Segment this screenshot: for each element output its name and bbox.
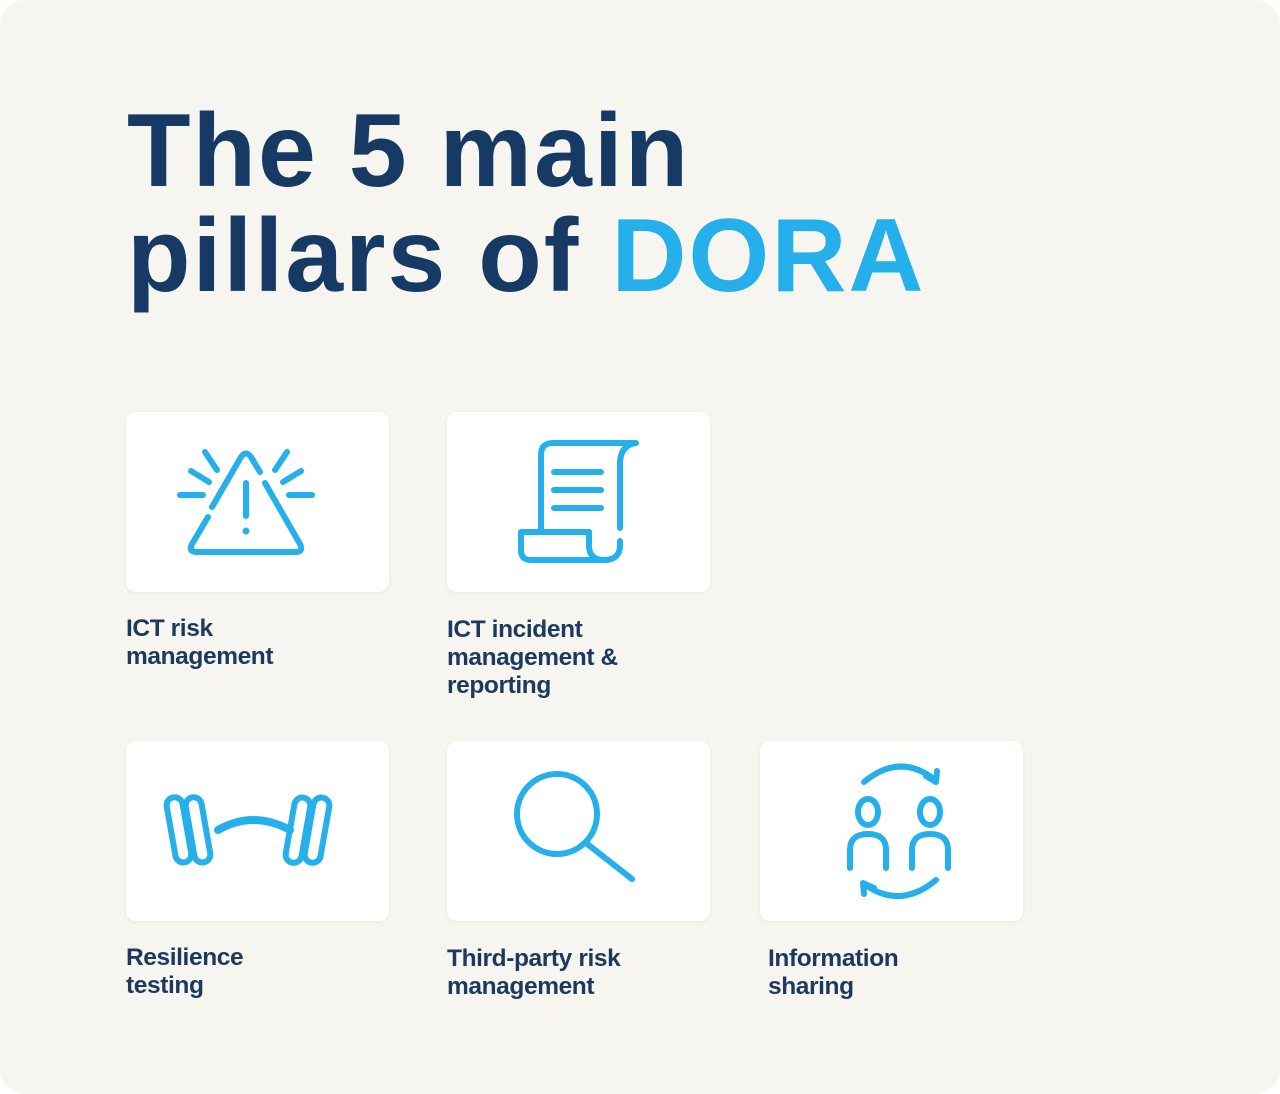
label: information sharing: [768, 945, 898, 1000]
card: ICT risk management: [126, 412, 389, 592]
card: third-party risk: [447, 741, 710, 921]
title: [127, 93, 926, 314]
card: information sharing: [760, 741, 1023, 921]
icon: magnifying glass: [517, 774, 632, 879]
label: information sharing: Information: [768, 945, 898, 972]
card: ICT incident management: [447, 412, 710, 592]
card: resilience testing: [126, 741, 389, 921]
icon: people sharing: [850, 766, 948, 896]
title: The 5 main: [127, 93, 690, 209]
icon: dumbbell: [165, 796, 331, 864]
label: ICT risk management: ICT risk: [126, 615, 213, 642]
label: resilience testing: testing: [126, 972, 204, 999]
label: ICT risk management: [126, 615, 274, 670]
title: pillars of DORA: [127, 198, 926, 314]
label: ICT incident management & reporting: management &: [447, 644, 618, 671]
label: third-party risk management: [447, 945, 621, 1000]
icon: scroll document: [521, 443, 636, 560]
icon: warning alert: [180, 452, 312, 552]
label: resilience testing: [126, 944, 243, 999]
label: ICT risk management: management: [126, 643, 273, 670]
label: resilience testing: Resilience: [126, 944, 243, 971]
label: ICT incident management & reporting: reporting: [447, 672, 551, 699]
label: third-party risk management: Third-party risk: [447, 945, 620, 972]
label: ICT incident management & reporting: [447, 616, 618, 699]
label: third-party risk management: management: [447, 973, 594, 1000]
label: information sharing: sharing: [768, 973, 854, 1000]
label: ICT incident management & reporting: ICT incident: [447, 616, 582, 643]
